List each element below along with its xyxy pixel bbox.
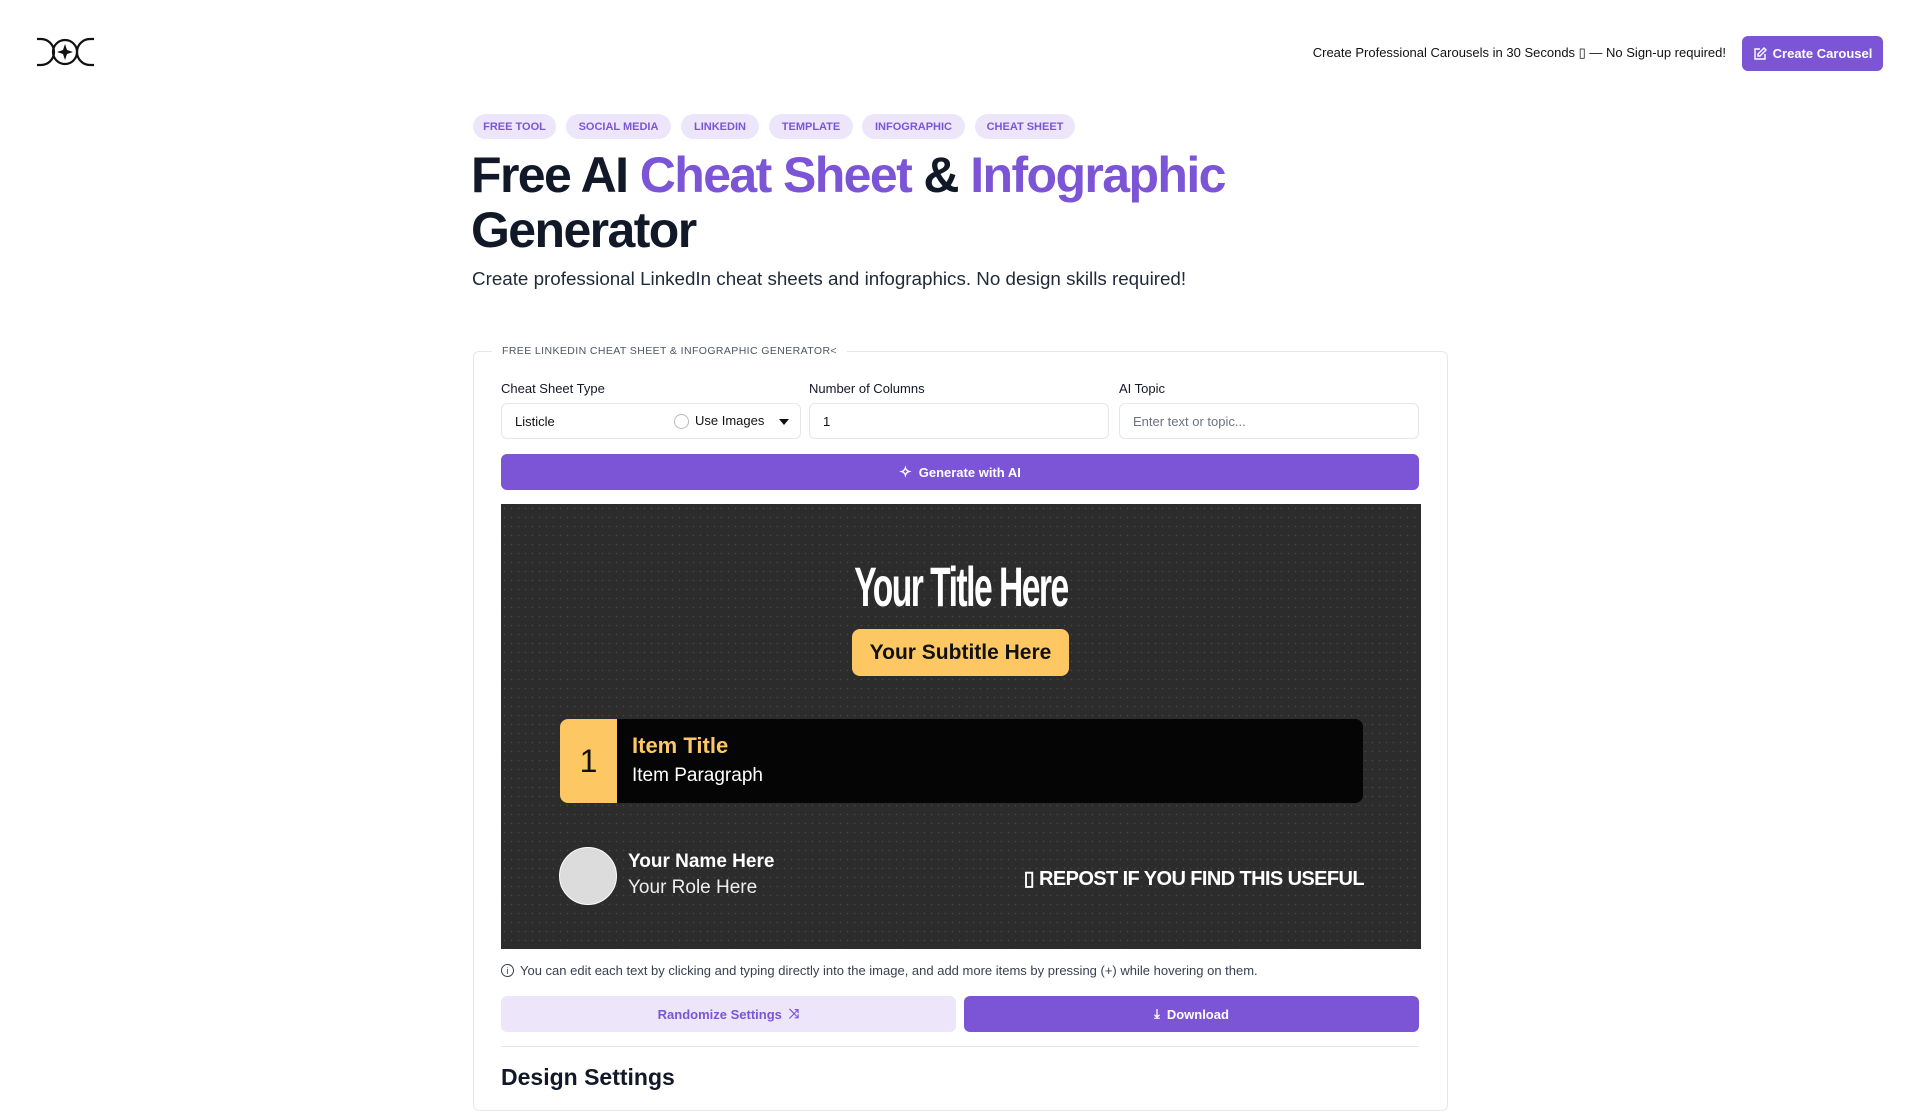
label: columns: Number of Columns	[809, 381, 925, 396]
input: type select	[501, 403, 801, 439]
button: create carousel: Create Carousel	[1773, 46, 1872, 61]
button: download: Download	[1167, 1006, 1229, 1022]
button: generate: ✧	[899, 464, 912, 481]
title: Generator	[471, 202, 696, 258]
button: generate	[501, 454, 1419, 490]
number box: 1	[580, 742, 597, 778]
input: topic: Enter text or topic...	[1133, 414, 1246, 428]
label: cheat sheet type: Cheat Sheet Type	[501, 381, 605, 396]
heading: design settings: Design Settings	[501, 1064, 675, 1090]
item paragraph: Item Paragraph	[632, 765, 763, 786]
button: randomize: ⤨	[789, 1006, 799, 1021]
item title: Item Title	[632, 733, 728, 758]
tags: LINKEDIN	[694, 120, 746, 132]
input: type select: Use Images	[695, 413, 764, 428]
button: randomize: Randomize Settings	[658, 1006, 782, 1022]
button: download	[964, 996, 1419, 1032]
infographic canvas	[501, 504, 1421, 949]
tags	[473, 114, 1075, 139]
button: create carousel	[1742, 36, 1883, 71]
title: Free AI Cheat Sheet & Infographic	[471, 147, 1225, 203]
logo	[37, 38, 94, 66]
canvas subtitle pill: Your Subtitle Here	[870, 640, 1051, 664]
input: columns: 1	[823, 414, 830, 428]
subtitle: Create professional LinkedIn cheat sheets and infographics. No design skills required!	[472, 268, 1186, 289]
item row	[560, 719, 1363, 803]
panel legend: FREE LINKEDIN CHEAT SHEET & INFOGRAPHIC GENERATOR<	[502, 345, 837, 357]
number box	[560, 719, 617, 803]
button: download: ⤓	[1154, 1006, 1160, 1021]
input: columns	[809, 403, 1109, 439]
panel: generator	[473, 351, 1448, 1111]
canvas title: Your Title Here	[854, 555, 1068, 618]
tags: SOCIAL MEDIA	[579, 120, 658, 132]
tags: FREE TOOL	[483, 120, 546, 132]
info note: You can edit each text by clicking and typing directly into the image, and add more items by pressing (+) while hovering on them.	[520, 963, 1258, 978]
author name: Your Name Here	[628, 851, 774, 872]
tags: TEMPLATE	[782, 120, 840, 132]
label: ai topic: AI Topic	[1119, 381, 1165, 396]
button: generate: Generate with AI	[919, 464, 1021, 480]
header tagline: Create Professional Carousels in 30 Seconds ▯ — No Sign-up required!	[1313, 45, 1726, 60]
input: topic	[1119, 403, 1419, 439]
tags: CHEAT SHEET	[987, 120, 1063, 132]
input: type select: Listicle	[515, 414, 555, 428]
repost callout: ▯ REPOST IF YOU FIND THIS USEFUL	[1024, 868, 1364, 890]
avatar	[559, 847, 617, 905]
button: randomize	[501, 996, 956, 1032]
tags: INFOGRAPHIC	[875, 120, 952, 132]
info note: i	[506, 966, 508, 976]
title	[471, 147, 1225, 258]
author role: Your Role Here	[628, 877, 757, 898]
canvas subtitle pill	[852, 629, 1069, 676]
